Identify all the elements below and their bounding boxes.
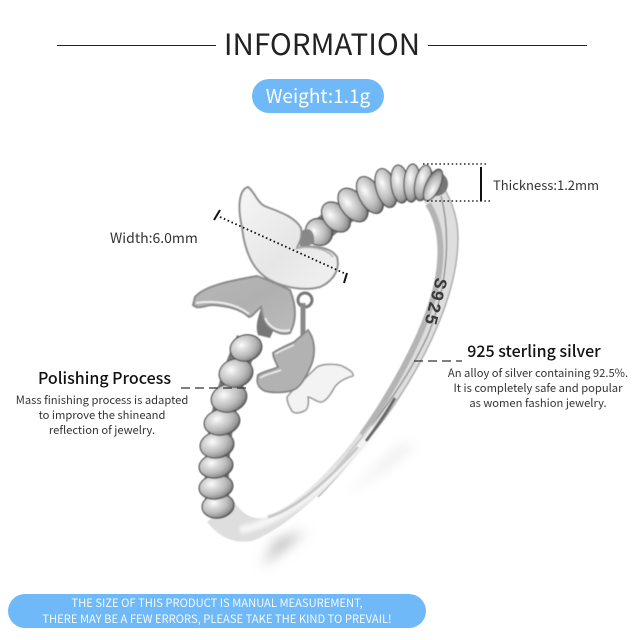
sterling description: It is completely safe and popular [454,380,622,396]
polishing description: to improve the shineand [39,407,165,423]
sterling description [448,365,628,411]
width measure [214,210,347,283]
disclaimer pill [8,594,426,628]
butterfly charm: small [257,330,353,413]
engraving: S925: S925 [418,276,450,328]
ring band [207,166,458,542]
sterling description: An alloy of silver containing 92.5%. [448,365,628,381]
polishing text block [16,365,188,438]
butterfly charm: large [193,187,338,338]
polishing leader line [181,387,247,389]
sterling leader line [414,360,462,362]
title rule: right [428,45,587,46]
title rule: left [57,45,216,46]
polishing description: reflection of jewelry. [49,422,155,438]
weight pill: Weight:1.1g [266,82,370,109]
polishing heading: Polishing Process [38,365,171,389]
polishing description [16,392,188,438]
sterling text block [448,338,628,411]
disclaimer pill: THERE MAY BE A FEW ERRORS, PLEASE TAKE THE KIND TO PREVAIL! [42,611,392,627]
title: INFORMATION [224,22,420,64]
sterling description: as women fashion jewelry. [469,395,607,411]
weight pill [252,79,384,113]
beads: upper arc [300,164,447,251]
bead backing: upper [318,184,436,233]
width label: Width:6.0mm [110,228,198,248]
sterling heading: 925 sterling silver [467,338,601,362]
thickness measure [423,164,491,201]
bead backing: lower [217,340,248,512]
disclaimer pill: THE SIZE OF THIS PRODUCT IS MANUAL MEASUREMENT, [71,595,363,611]
beads: lower arc [197,331,265,520]
ring shadow [262,445,416,566]
thickness label: Thickness:1.2mm [493,175,599,194]
polishing description: Mass finishing process is adapted [16,392,188,408]
